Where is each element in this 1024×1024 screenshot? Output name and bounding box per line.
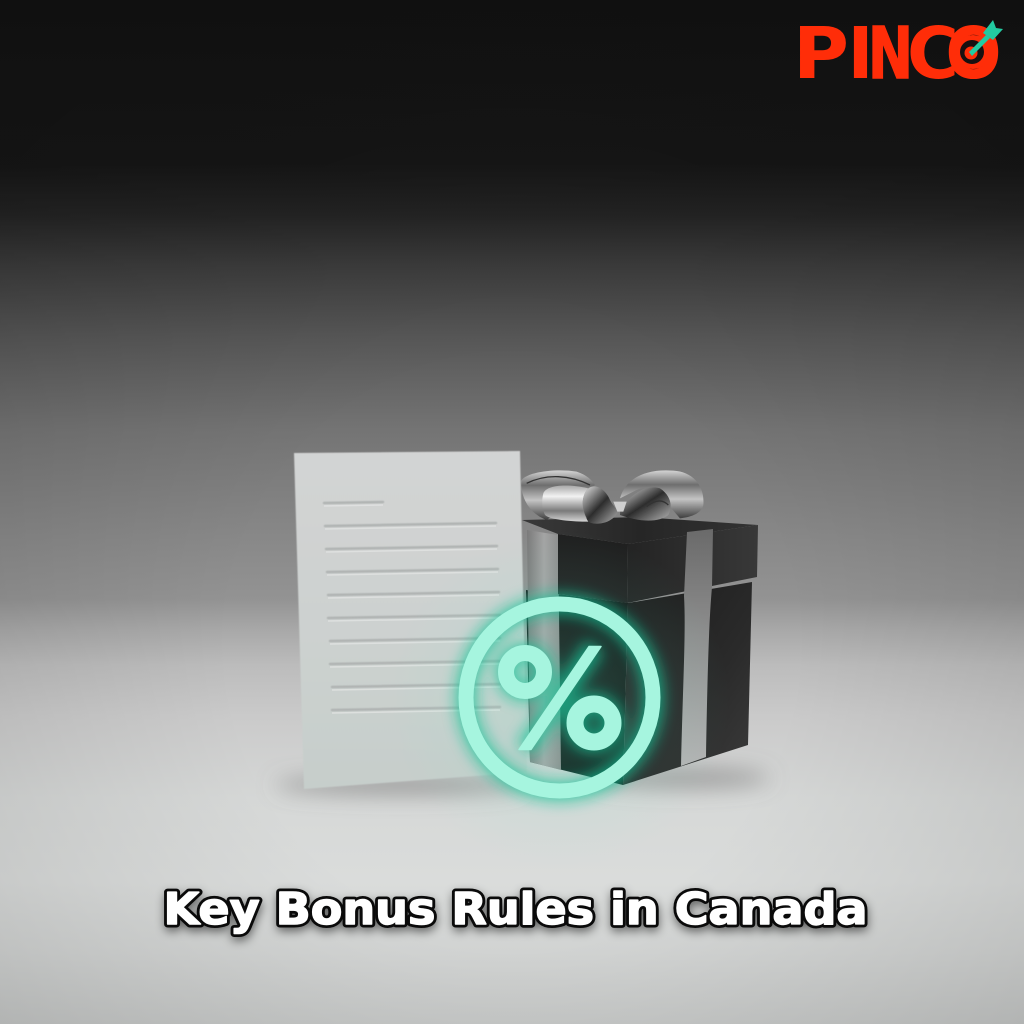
title: Key Bonus Rules in Canada xyxy=(164,884,868,935)
logo: PINCO xyxy=(793,12,1003,95)
left ribbon xyxy=(527,530,561,770)
title: Key Bonus Rules in Canada xyxy=(164,888,868,939)
teal light tint xyxy=(390,530,730,870)
icon: target centre and arrow xyxy=(956,20,1003,69)
box right face xyxy=(623,582,752,785)
sharp ring and percent sign xyxy=(466,604,653,791)
floor shadow xyxy=(275,768,770,794)
outer glow xyxy=(466,604,653,791)
bow xyxy=(521,470,703,524)
lid right face xyxy=(627,525,758,603)
logo: PINCO: N xyxy=(868,12,913,95)
lid left face xyxy=(558,534,628,603)
scene: document and gift xyxy=(275,451,770,870)
logo: PINCO: O xyxy=(946,12,1002,95)
logo: PINCO: C xyxy=(907,12,959,95)
box left face xyxy=(526,590,628,785)
gift box xyxy=(521,470,758,785)
right ribbon xyxy=(681,529,713,766)
document text lines xyxy=(324,502,500,713)
icon: glowing percent badge xyxy=(390,530,730,870)
logo: PINCO: P xyxy=(793,12,849,95)
title: Key Bonus Rules in Canada xyxy=(164,884,868,935)
lid top xyxy=(522,517,758,544)
logo: PINCO: I xyxy=(848,12,874,95)
document xyxy=(294,451,527,789)
